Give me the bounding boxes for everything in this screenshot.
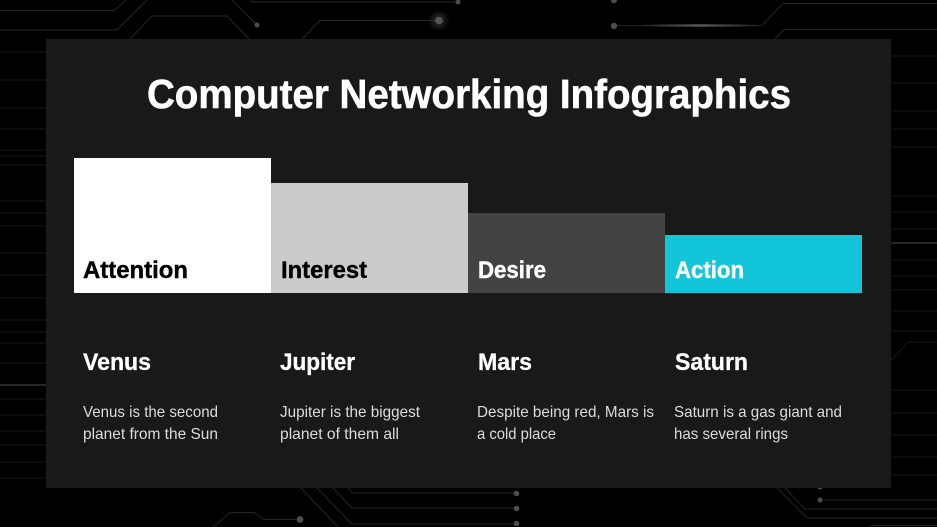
column: Mars: Mars bbox=[478, 349, 532, 376]
step bar: Action: Action bbox=[675, 257, 744, 284]
column: Venus: Venus is the second bbox=[83, 404, 218, 421]
column: Mars: Despite being red, Mars is bbox=[477, 404, 654, 421]
main panel bbox=[46, 39, 891, 488]
title: Computer Networking Infographics bbox=[147, 71, 791, 117]
column: Venus: planet from the Sun bbox=[83, 426, 218, 443]
column: Jupiter: Jupiter is the biggest bbox=[280, 404, 421, 421]
step bar: Attention: Attention bbox=[83, 257, 188, 284]
step bar: Attention bbox=[74, 158, 271, 293]
column: Saturn: Saturn is a gas giant and bbox=[674, 404, 842, 421]
step bar: Desire: Desire bbox=[478, 257, 546, 284]
column: Jupiter bbox=[280, 349, 421, 443]
column: Saturn: has several rings bbox=[674, 426, 788, 443]
column: Jupiter: Jupiter bbox=[280, 349, 355, 376]
step bar: Desire bbox=[468, 213, 665, 293]
column: Jupiter: planet of them all bbox=[280, 426, 399, 443]
column: Mars bbox=[477, 349, 654, 443]
step bar: Action bbox=[665, 235, 862, 293]
step bar: Interest: Interest bbox=[281, 257, 367, 284]
step bar: Interest bbox=[271, 183, 468, 293]
column: Saturn bbox=[674, 349, 842, 443]
column: Venus bbox=[83, 349, 218, 443]
column: Venus: Venus bbox=[83, 349, 151, 376]
column: Saturn: Saturn bbox=[675, 349, 748, 376]
column: Mars: a cold place bbox=[477, 426, 556, 443]
